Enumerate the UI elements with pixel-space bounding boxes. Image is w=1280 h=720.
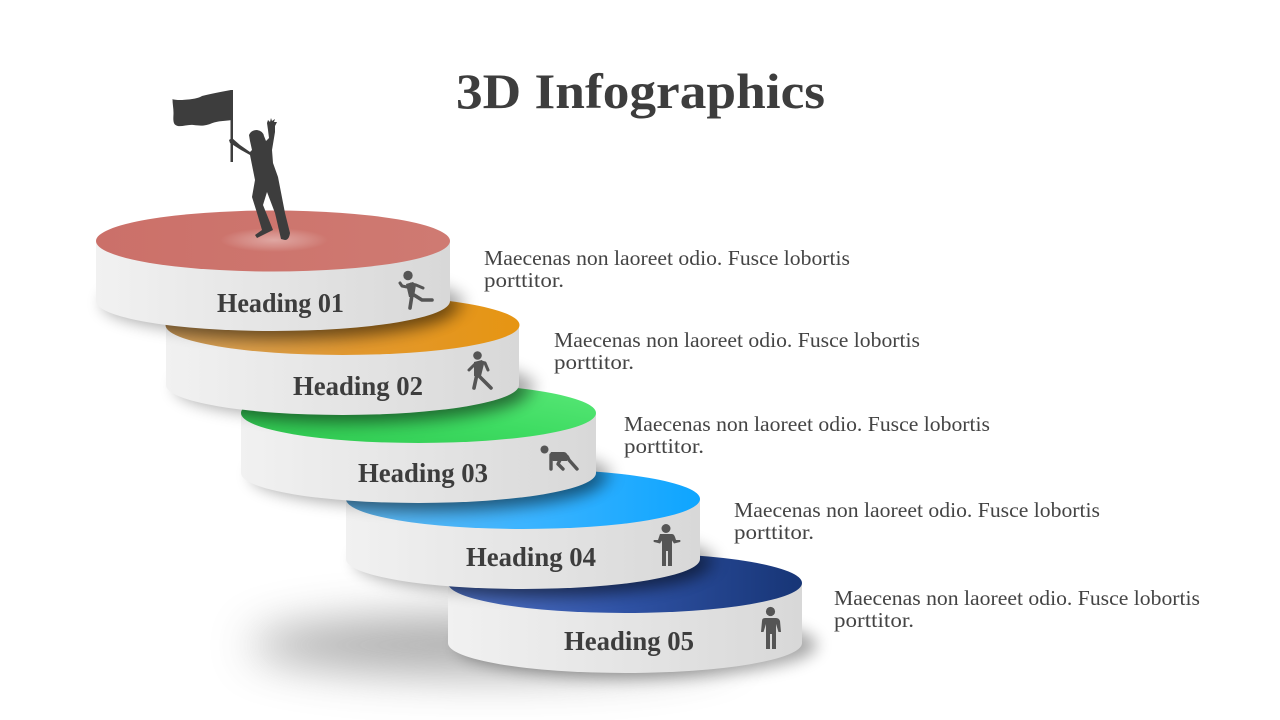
flag pole bbox=[230, 90, 233, 162]
title: 3D Infographics bbox=[456, 63, 825, 119]
description 05 bbox=[834, 586, 1200, 632]
shadow under disc 02 bbox=[175, 355, 535, 419]
disc 01 top bbox=[96, 210, 450, 272]
icon: person shrugging bbox=[654, 524, 680, 566]
heading 04: Heading 04 bbox=[466, 542, 596, 572]
disc 02 top bbox=[166, 295, 520, 355]
icon: standing person bbox=[761, 607, 781, 649]
shadow under disc 03 bbox=[251, 443, 611, 507]
disc 03 bbox=[241, 383, 596, 503]
description 04: Maecenas non laoreet odio. Fusce lobortis bbox=[734, 498, 1100, 522]
figure with flag bbox=[172, 90, 290, 240]
disc 05 side bbox=[448, 583, 802, 673]
description 01 bbox=[484, 246, 850, 292]
shadow on disc 05 top bbox=[449, 556, 707, 606]
description 04 bbox=[734, 498, 1100, 544]
floor shadow bbox=[250, 615, 730, 675]
shadow on disc 04 top bbox=[346, 472, 606, 522]
icon: person walking bbox=[469, 351, 491, 388]
shadow under disc 04 bbox=[355, 529, 715, 593]
heading 05: Heading 05 bbox=[564, 626, 694, 656]
disc 01 side bbox=[96, 241, 450, 331]
shadow on disc 02 top bbox=[166, 301, 458, 350]
flag bbox=[172, 90, 232, 126]
description 01: porttitor. bbox=[484, 268, 564, 292]
icon: person running bbox=[400, 271, 432, 308]
heading 02: Heading 02 bbox=[293, 371, 423, 401]
shadow under disc 05 bbox=[457, 613, 817, 677]
disc 04 bbox=[346, 469, 700, 589]
description 05: Maecenas non laoreet odio. Fusce lobortis bbox=[834, 586, 1200, 610]
shadow under disc 01 bbox=[102, 271, 464, 335]
person bbox=[229, 118, 290, 240]
description 02: Maecenas non laoreet odio. Fusce lobortis bbox=[554, 328, 920, 352]
description 02: porttitor. bbox=[554, 350, 634, 374]
description 05: porttitor. bbox=[834, 608, 914, 632]
description 04: porttitor. bbox=[734, 520, 814, 544]
disc 05 bbox=[448, 553, 802, 673]
shadow on disc 03 top bbox=[241, 388, 528, 434]
disc 02 bbox=[166, 295, 520, 415]
description 02 bbox=[554, 328, 920, 374]
icon: person crouching bbox=[540, 446, 577, 469]
heading 01: Heading 01 bbox=[217, 288, 344, 318]
disc 04 top bbox=[346, 469, 700, 529]
description 03 bbox=[624, 412, 990, 458]
disc 03 side bbox=[241, 413, 596, 503]
disc 05 top bbox=[448, 553, 802, 613]
disc 02 side bbox=[166, 325, 519, 415]
description 03: porttitor. bbox=[624, 434, 704, 458]
heading 03: Heading 03 bbox=[358, 458, 488, 488]
description 01: Maecenas non laoreet odio. Fusce lobortis bbox=[484, 246, 850, 270]
disc 01 bbox=[96, 210, 450, 331]
description 03: Maecenas non laoreet odio. Fusce lobortis bbox=[624, 412, 990, 436]
figure glow bbox=[220, 228, 328, 252]
disc 04 side bbox=[346, 499, 700, 589]
disc 03 top bbox=[241, 383, 596, 443]
